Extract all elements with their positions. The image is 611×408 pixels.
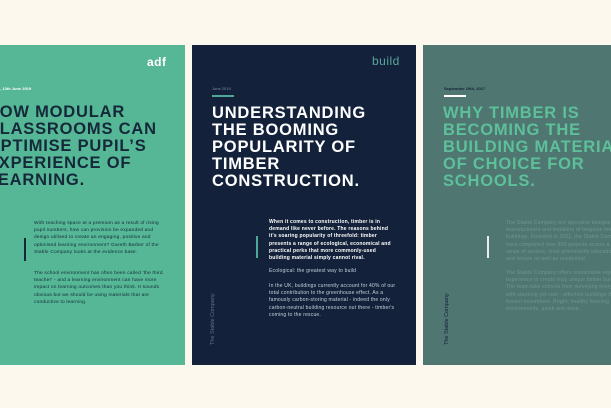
title: WHY TIMBER IS (443, 104, 580, 122)
subheading: Ecological: the greatest way to build (269, 268, 356, 274)
title (212, 104, 366, 190)
title: CONSTRUCTION. (212, 172, 360, 190)
date underline (444, 95, 466, 96)
title: POPULARITY OF (212, 138, 356, 156)
logo: adf: adf (147, 55, 166, 69)
accent bar (487, 236, 488, 258)
date: June 2019 (212, 86, 231, 91)
title: UNDERSTANDING (212, 104, 366, 122)
intro text: When it comes to construction, timber is in demand like never before. The reasons behind it's soaring popularity of threefold: timber presents a range of ecological, economical and practical perks that more commonly-used building material simply cannot rival. (269, 219, 391, 261)
date: September 19th, 2017 (444, 86, 485, 91)
logo: build: build (372, 54, 400, 68)
vertical company name: The Stable Company (210, 293, 216, 345)
title: SCHOOLS. (443, 172, 536, 190)
panel: adf modular classrooms (0, 45, 185, 365)
panel: build timber construction (192, 45, 416, 365)
title: OF CHOICE FOR (443, 155, 584, 173)
title (443, 104, 611, 190)
panel: why timber schools (423, 45, 611, 365)
title: BECOMING THE (443, 121, 581, 139)
vertical company name: The Stable Company (444, 293, 450, 345)
body text: The school environment has often been called 'the third teacher' - and a learning environment can have more impact on learning outcomes than you think. It sounds obvious but we should be using materials that are conductive to learning. (34, 271, 163, 305)
accent bar (24, 238, 26, 261)
title: TIMBER (212, 155, 280, 173)
date underline (212, 95, 234, 96)
accent bar (256, 236, 258, 258)
title: THE BOOMING (212, 121, 339, 139)
body text: In the UK, buildings currently account for 40% of our total contribution to the greenhouse effect. As a famously carbon-storing material - indeed the only carbon-neutral building resource out there - timber's coming to the rescue. (269, 283, 395, 318)
title (0, 103, 157, 189)
intro text: With teaching space at a premium as a result of rising pupil numbers, how can provision be expanded and design utilised to create an engaging, positive and optimised learning environment? Gareth Barber of the Stable Company looks at the evidence base. (34, 221, 159, 255)
